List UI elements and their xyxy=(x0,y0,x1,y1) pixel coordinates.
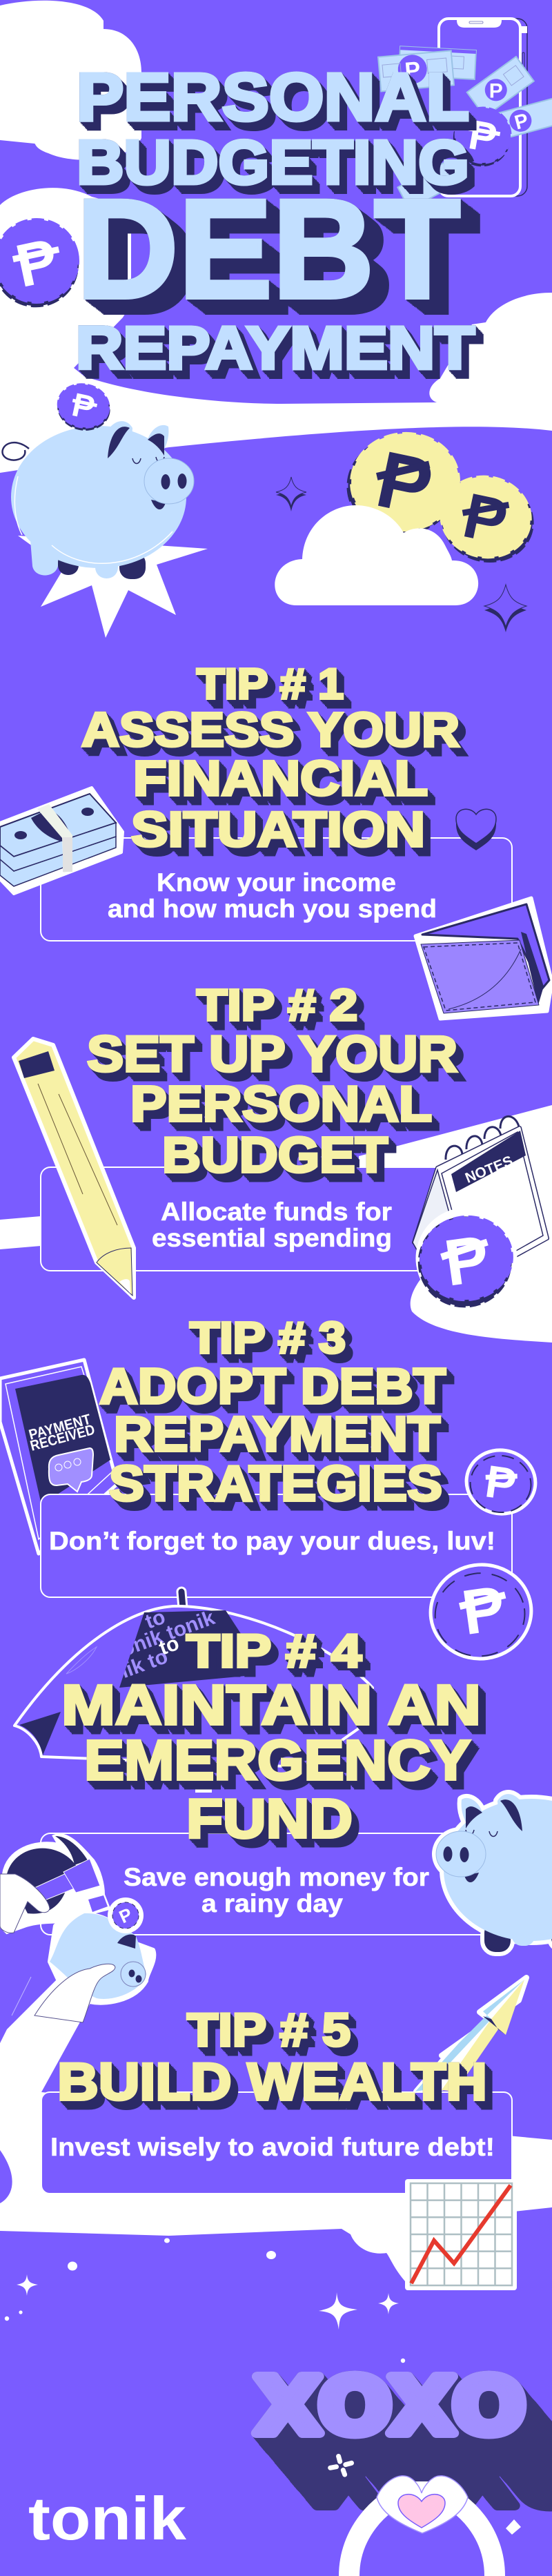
star small xyxy=(276,477,306,511)
small arm xyxy=(34,1964,115,2022)
bill right upper: P xyxy=(489,79,503,102)
small piggy bank xyxy=(34,1897,154,2022)
white cloud xyxy=(275,505,478,605)
tip 2 heading: TIP # 2 xyxy=(197,980,357,1030)
tip 2 heading: BUDGET xyxy=(162,1128,388,1183)
title line: personal: PERSONAL xyxy=(77,59,469,135)
tip 1 heading: TIP # 1 xyxy=(197,661,344,708)
title xyxy=(76,59,475,382)
tip 3 heading: TIP # 3 xyxy=(190,1313,346,1363)
right pig body xyxy=(444,1794,552,1946)
title line: repayment: REPAYMENT xyxy=(76,315,475,382)
tip 3 phone icon xyxy=(0,1360,117,1554)
arms ring xyxy=(349,2492,495,2576)
tip 3 panel xyxy=(0,1313,540,1665)
tip 4 heading: EMERGENCY xyxy=(84,1729,471,1792)
tip 2 box xyxy=(41,1167,512,1271)
halo xyxy=(0,1835,109,1933)
line chart icon xyxy=(405,2179,517,2290)
small yellow coin: P xyxy=(457,480,513,558)
white band behind tip 2 right xyxy=(359,1105,552,1343)
pencil icon xyxy=(14,1039,134,1298)
tip 4 heading: MAINTAIN AN xyxy=(61,1674,481,1737)
small pig body xyxy=(50,1913,146,1999)
tip 1 panel xyxy=(0,661,552,1019)
hammer and hand xyxy=(0,1835,109,1933)
small sparkle near hands xyxy=(328,2453,521,2535)
arrow icon xyxy=(415,1978,526,2091)
tip 1 box xyxy=(41,838,512,941)
tip 4 heading: TIP # 4 xyxy=(186,1625,362,1677)
big yellow coin: P xyxy=(369,433,440,533)
tip 5 body text: Invest wisely to avoid future debt! xyxy=(50,2133,495,2161)
bill bottom xyxy=(397,160,460,209)
tip 1 body text: and how much you spend xyxy=(108,895,437,923)
pig feet xyxy=(58,552,146,579)
pig eyes xyxy=(132,457,164,464)
wallet icon xyxy=(415,898,552,1019)
pig snout xyxy=(144,458,194,504)
thin sleeve lines xyxy=(12,1977,31,2016)
second purple coin xyxy=(415,105,468,157)
tip 4 body text: a rainy day xyxy=(201,1889,343,1918)
right pig face xyxy=(436,1830,497,1882)
purple handle xyxy=(34,1872,76,1902)
white wave and arm behind tip 5 xyxy=(0,1966,552,2281)
bill right lower: P xyxy=(512,110,531,134)
left purple coin xyxy=(0,212,86,313)
tip 2 body text: essential spending xyxy=(152,1224,392,1252)
tip 5 panel xyxy=(41,1978,526,2290)
tip 3 body text: Don’t forget to pay your dues, luv! xyxy=(49,1527,495,1555)
hammer head navy xyxy=(7,1848,77,1914)
tip 5 heading: BUILD WEALTH xyxy=(57,2053,487,2111)
tip 1 body text: Know your income xyxy=(157,868,396,897)
tip 2 heading xyxy=(87,980,457,1183)
phone xyxy=(439,19,527,196)
tip 4 heading xyxy=(61,1625,481,1849)
tip 3 heading: ADOPT DEBT xyxy=(99,1359,446,1414)
umbrella icon: onik tonik xyxy=(118,1606,218,1661)
tip 4 panel xyxy=(14,1588,552,1952)
big yellow coin xyxy=(344,428,463,538)
tip 2 heading: SET UP YOUR xyxy=(87,1026,457,1082)
pig body xyxy=(11,426,186,578)
coin on pig: P xyxy=(69,387,98,427)
tip 5 heading xyxy=(57,2004,487,2111)
tip 2 heading: PERSONAL xyxy=(130,1077,432,1132)
tip 1 heading: SITUATION xyxy=(131,803,425,857)
starburst behind piggy xyxy=(18,536,208,638)
bill front xyxy=(378,50,454,91)
hands xyxy=(377,2476,468,2533)
right pig halo xyxy=(436,1794,552,1952)
bill right upper xyxy=(467,57,534,117)
pig ears xyxy=(103,421,168,456)
notes icon xyxy=(411,1116,547,1314)
bill right lower xyxy=(497,99,552,139)
hammer arc xyxy=(55,1836,88,1865)
right pig ears xyxy=(466,1799,522,1831)
tip 3 heading xyxy=(99,1313,446,1512)
tip 3 phone icon: PAYMENT xyxy=(27,1412,92,1443)
hand xyxy=(0,1874,50,1933)
small purple coin xyxy=(462,1445,540,1519)
pig mouth xyxy=(151,500,166,509)
purple band xyxy=(63,1859,100,1893)
small yellow coin xyxy=(433,469,541,569)
yellow coins and cloud xyxy=(275,428,541,605)
tip 1 body text xyxy=(108,868,437,923)
tip 3 heading: STRATEGIES xyxy=(109,1456,442,1512)
small pig snout xyxy=(121,1962,146,1987)
umbrella icon: to xyxy=(156,1632,182,1660)
pig ear inner xyxy=(108,427,164,458)
tip 1 heading: FINANCIAL xyxy=(133,752,428,806)
large purple coin xyxy=(424,1559,538,1665)
umbrella icon: nik to xyxy=(111,1645,171,1686)
small pig coin: P xyxy=(116,1904,135,1927)
tip 4 box xyxy=(41,1833,512,1935)
bill front: P xyxy=(404,57,422,84)
tip 5 heading: TIP # 5 xyxy=(187,2004,351,2056)
tip 2 panel xyxy=(14,980,547,1314)
purple coin xyxy=(450,103,515,170)
coin on pig xyxy=(54,380,114,434)
bill back xyxy=(399,46,476,79)
pig tail xyxy=(2,442,29,460)
piggy bank xyxy=(2,380,194,579)
purple coin: P xyxy=(465,111,500,162)
tip 3 heading: REPAYMENT xyxy=(114,1407,440,1462)
right piggy bank xyxy=(436,1794,552,1952)
small pig coin xyxy=(108,1897,144,1933)
xoxo text: XOXO xyxy=(255,2362,526,2452)
right pig feet xyxy=(484,1922,552,1952)
white wave behind title xyxy=(0,188,552,473)
tip 4 body text xyxy=(124,1863,429,1918)
sparkle stars top xyxy=(276,477,526,632)
small pig ear xyxy=(117,1934,136,1949)
phone with flying money xyxy=(378,19,552,209)
heart hands xyxy=(349,2476,495,2576)
tip 5 box xyxy=(41,2092,512,2194)
tip 4 body text: Save enough money for xyxy=(124,1863,429,1891)
sparkles and dots xyxy=(5,2238,405,2363)
tip 2 body text xyxy=(152,1198,392,1252)
star large xyxy=(484,585,526,632)
tonik logo: tonik xyxy=(28,2484,187,2553)
title line: debt: DEBT xyxy=(77,170,460,328)
small purple coin: P xyxy=(482,1455,520,1510)
small pig halo xyxy=(50,1915,154,2003)
umbrella icon: to xyxy=(142,1606,168,1634)
umbrella icon xyxy=(14,1588,373,1793)
notes icon: P xyxy=(440,1222,493,1300)
tip 4 heading: FUND xyxy=(186,1788,353,1849)
tip 2 body text: Allocate funds for xyxy=(161,1198,392,1226)
large purple coin: P xyxy=(457,1573,509,1648)
tip 3 box xyxy=(41,1494,512,1597)
money stack icon xyxy=(0,788,123,894)
handle end xyxy=(88,1895,108,1912)
tip 1 heading xyxy=(81,661,460,857)
tip 3 phone icon: RECEIVED xyxy=(28,1422,97,1454)
left purple coin: P xyxy=(10,225,64,300)
title line: budgeting: BUDGETING xyxy=(77,128,469,197)
tip 1 heart icon xyxy=(456,809,496,850)
white band behind tip 2 left xyxy=(0,1216,41,1249)
tip 1 heading: ASSESS YOUR xyxy=(81,703,460,757)
top left cloud xyxy=(0,1,141,160)
pink heart xyxy=(398,2495,445,2528)
notes icon: NOTES xyxy=(463,1153,515,1187)
